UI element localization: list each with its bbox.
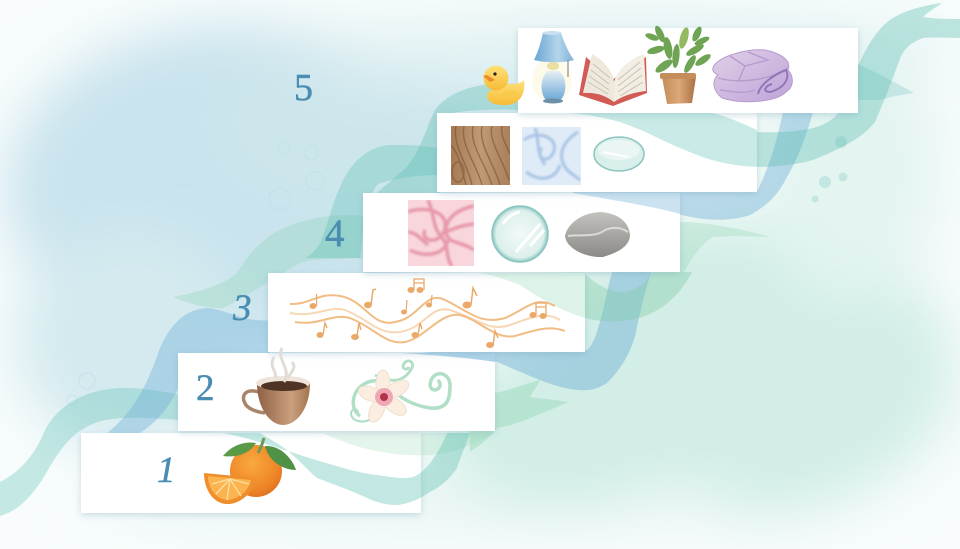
ribbon: green center wave	[585, 272, 692, 322]
icon: table lamp	[532, 31, 574, 104]
icon: wood swatch	[451, 126, 512, 185]
number 3: 3	[232, 288, 252, 329]
number 4: 4	[325, 212, 344, 255]
icon: flower with swirls	[351, 361, 450, 425]
ribbon: teal lower left	[0, 388, 180, 516]
icon: music staff and notes	[290, 279, 565, 348]
icon: orange and slice	[204, 438, 296, 504]
ribbon: teal top wave by duck	[373, 83, 520, 196]
icon: rubber duck	[483, 66, 524, 105]
ribbon: blue lower left	[107, 308, 270, 433]
icon: folded purple blanket	[713, 50, 792, 102]
icon: open book	[579, 54, 647, 106]
ribbon: blue upper right	[573, 112, 813, 220]
card 3	[268, 273, 585, 352]
ribbon: teal over card 5	[570, 113, 757, 167]
ribbon: teal upper right end	[757, 3, 960, 167]
ribbon: teal middle wave	[305, 145, 437, 258]
ribbon: green upper wave	[173, 215, 365, 308]
card 4	[363, 193, 680, 272]
icon: pink fabric swatch	[408, 200, 474, 266]
number 5: 5	[294, 67, 313, 109]
icon: glass lens	[594, 137, 644, 171]
ribbon: green tail lower right	[470, 380, 568, 452]
number 1: 1	[157, 450, 176, 491]
icon: potted plant	[644, 24, 712, 104]
card 2	[178, 353, 495, 431]
ribbon: blue over card 2	[400, 353, 495, 362]
ribbons over cards	[223, 113, 757, 505]
icon: glass sphere	[492, 206, 548, 262]
icon: grey rock	[565, 212, 630, 257]
card 5	[437, 113, 757, 192]
icon: coffee cup	[244, 348, 310, 425]
ribbon: green tail center right	[680, 222, 770, 272]
ribbon: teal tail right of top card	[856, 63, 914, 100]
ribbon: blue over card 4	[573, 193, 680, 214]
card 1	[81, 433, 421, 513]
card 6	[518, 28, 858, 113]
ribbon: blue right descending	[420, 270, 652, 390]
number 2: 2	[196, 368, 214, 409]
ribbon: green over card 3	[480, 273, 585, 318]
ribbon: teal over card 1	[223, 433, 470, 505]
icon: blue fabric swatch	[522, 127, 581, 185]
ribbon: green under card 2	[323, 433, 495, 455]
